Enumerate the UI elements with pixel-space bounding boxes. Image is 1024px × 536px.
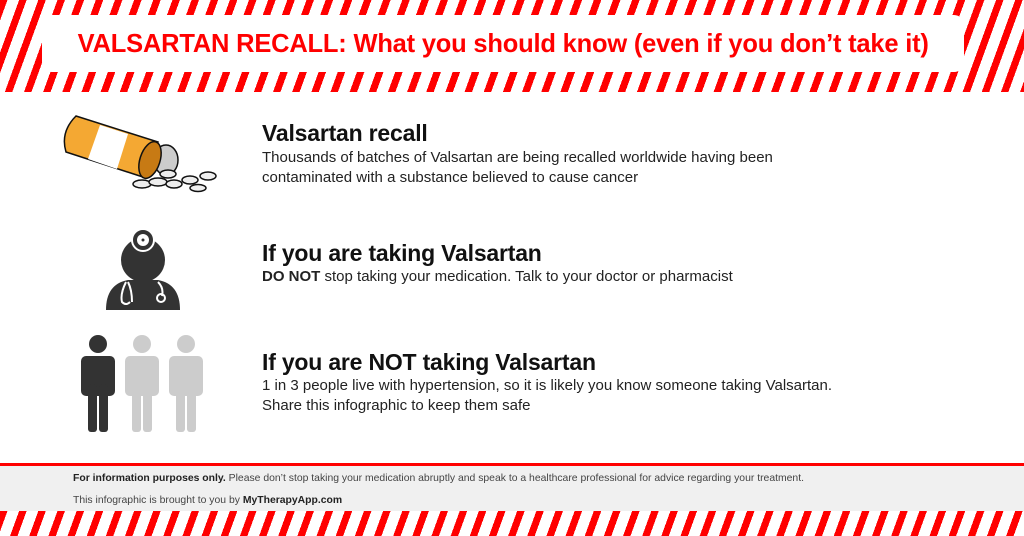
text block: taking: DO NOT stop taking your medication. Talk to your doctor or pharmacist: [262, 268, 733, 285]
title: VALSARTAN RECALL: What you should know (even if you don’t take it): [77, 28, 929, 58]
text block: taking: [262, 240, 733, 285]
bottom striped band: [0, 511, 1024, 536]
text block: not taking: 1 in 3 people live with hypertension, so it is likely you know someone taking Valsartan.: [262, 377, 832, 394]
top striped banner: [0, 0, 1024, 92]
text block: recall: contaminated with a substance believed to cause cancer: [262, 169, 638, 186]
text block: not taking: Share this infographic to keep them safe: [262, 397, 530, 414]
text block: recall: Valsartan recall: [262, 120, 428, 146]
text block: not taking: [262, 349, 832, 414]
text block: not taking: If you are NOT taking Valsartan: [262, 349, 596, 375]
text block: recall: [262, 120, 773, 186]
icon: three people: [81, 335, 203, 432]
icon: doctor: [106, 230, 180, 310]
credit: This infographic is brought to you by MyTherapyApp.com: [73, 495, 342, 506]
disclaimer: For information purposes only. Please don’t stop taking your medication abruptly and speak to a healthcare professional for advice regarding your treatment.: [73, 473, 804, 484]
title box: [42, 15, 964, 72]
footer: [0, 463, 1024, 511]
text block: recall: Thousands of batches of Valsartan are being recalled worldwide having been: [262, 149, 773, 166]
icon: pill bottle: [64, 115, 217, 192]
text block: taking: If you are taking Valsartan: [262, 240, 542, 266]
